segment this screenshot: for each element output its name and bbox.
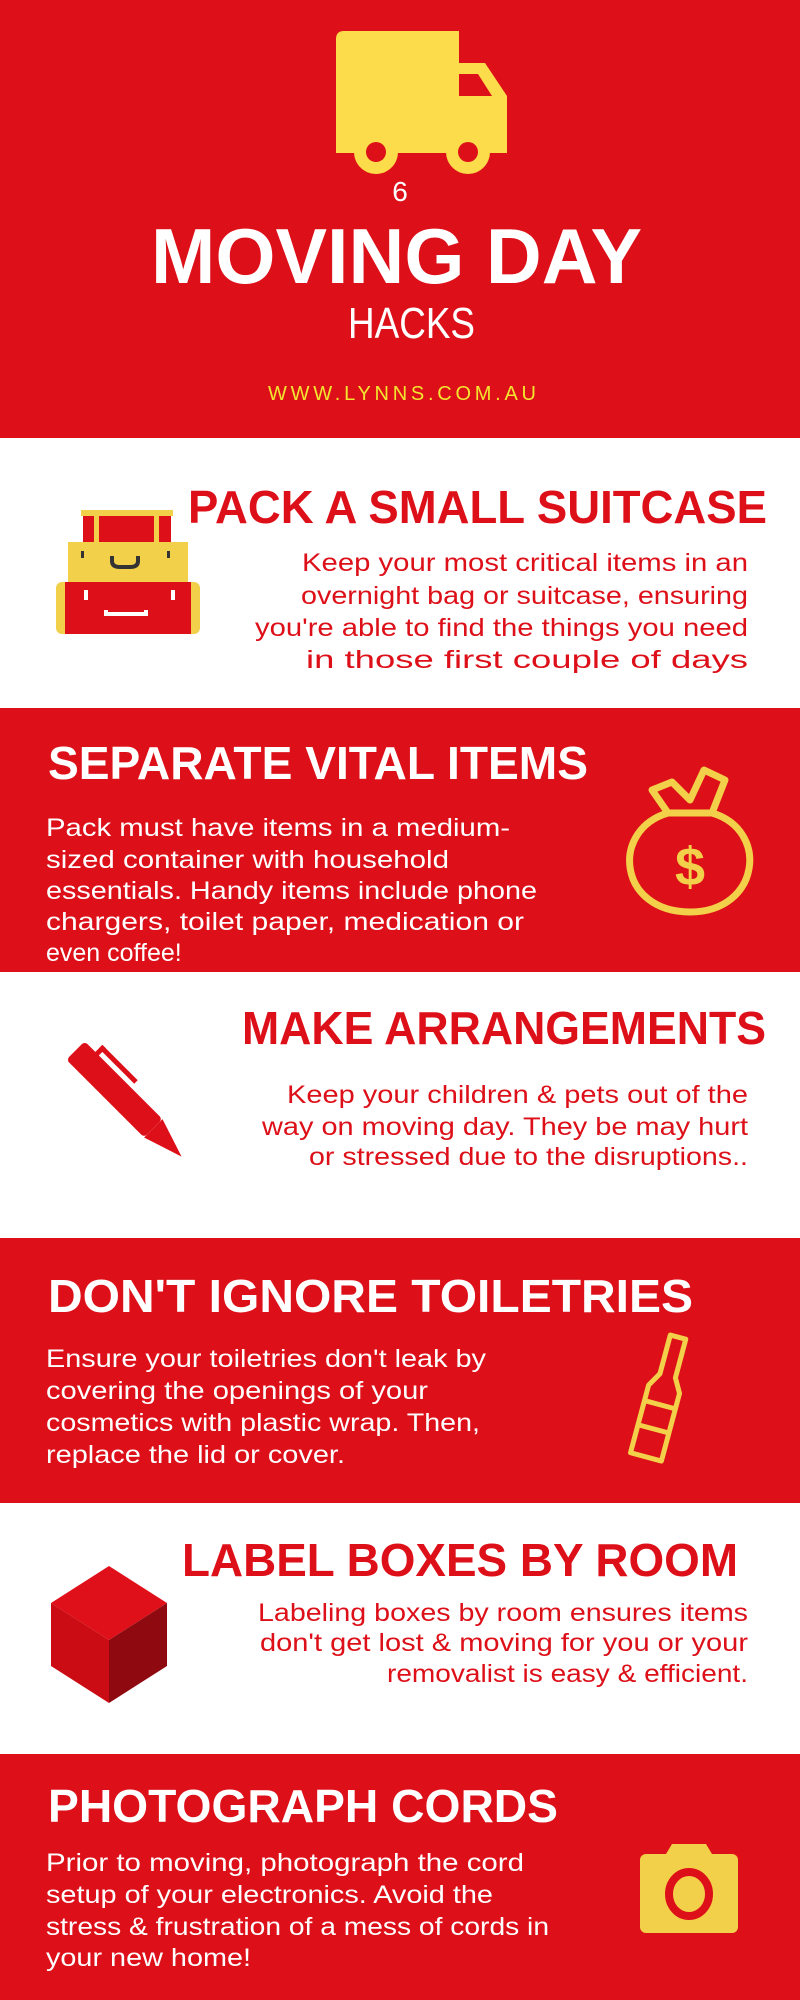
body text: you're able to find the things you need: [255, 614, 748, 642]
body text: sized container with household: [46, 846, 449, 874]
body text: Labeling boxes by room ensures items: [258, 1599, 748, 1627]
heading: PACK A SMALL SUITCASE: [188, 481, 767, 533]
body text: Pack must have items in a medium-: [46, 814, 510, 842]
body text: Prior to moving, photograph the cord: [46, 1849, 524, 1877]
body text: [255, 549, 748, 674]
body text: setup of your electronics. Avoid the: [46, 1881, 493, 1909]
panel: make arrangements: [0, 972, 800, 1238]
body text: stress & frustration of a mess of cords in: [46, 1913, 549, 1941]
panel: separate vital items: [0, 708, 800, 972]
body text: removalist is easy & efficient.: [387, 1660, 748, 1688]
panel: photograph cords: [0, 1754, 800, 2000]
body text: way on moving day. They be may hurt: [261, 1113, 748, 1141]
icon: money bag: $: [675, 837, 705, 897]
heading: MAKE ARRANGEMENTS: [242, 1002, 766, 1054]
body text: [46, 814, 537, 967]
body text: essentials. Handy items include phone: [46, 877, 537, 905]
title: MOVING DAY: [151, 212, 642, 300]
icon: cube: [51, 1566, 167, 1703]
body text: in those first couple of days: [306, 646, 748, 674]
body text: [46, 1849, 549, 1972]
url: WWW.LYNNS.COM.AU: [268, 383, 536, 405]
body text: [258, 1599, 748, 1688]
icon: camera: [640, 1844, 738, 1933]
header panel: [0, 0, 800, 438]
icon: money bag: [630, 770, 750, 912]
body text: [46, 1345, 487, 1469]
body text: [261, 1081, 748, 1171]
panel: label boxes: [0, 1503, 800, 1754]
body text: Keep your children & pets out of the: [287, 1081, 748, 1109]
body text: chargers, toilet paper, medication or: [46, 908, 524, 936]
panel: toiletries: [0, 1238, 800, 1503]
panel: pack a small suitcase: [0, 438, 800, 708]
number 6: 6: [392, 176, 408, 207]
body text: don't get lost & moving for you or your: [260, 1629, 748, 1657]
heading: LABEL BOXES BY ROOM: [182, 1534, 738, 1586]
icon: bottle: [630, 1333, 694, 1461]
heading: DON'T IGNORE TOILETRIES: [48, 1270, 693, 1322]
heading: PHOTOGRAPH CORDS: [48, 1780, 558, 1832]
body text: even coffee!: [46, 939, 182, 967]
body text: overnight bag or suitcase, ensuring: [301, 582, 748, 610]
icon: truck: [336, 31, 507, 174]
body text: Keep your most critical items in an: [302, 549, 748, 577]
subtitle: HACKS: [348, 299, 475, 348]
body text: covering the openings of your: [46, 1377, 428, 1405]
body text: Ensure your toiletries don't leak by: [46, 1345, 487, 1373]
icon: pen: [66, 1034, 198, 1166]
body text: cosmetics with plastic wrap. Then,: [46, 1409, 480, 1437]
icon: suitcases: [56, 510, 200, 634]
body text: or stressed due to the disruptions..: [309, 1143, 748, 1171]
heading: SEPARATE VITAL ITEMS: [48, 737, 588, 789]
body text: your new home!: [46, 1944, 251, 1972]
body text: replace the lid or cover.: [46, 1441, 345, 1469]
